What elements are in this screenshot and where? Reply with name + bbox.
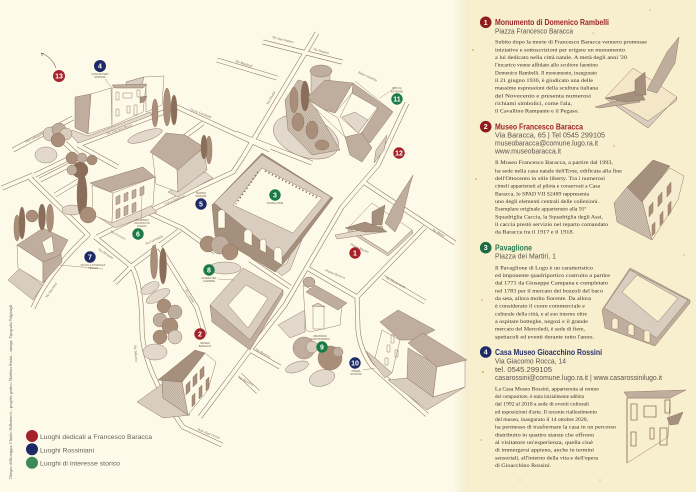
building: casa Baracca bbox=[137, 350, 216, 418]
marker labels bbox=[60, 72, 406, 376]
trees by casa Rossini bbox=[35, 88, 177, 178]
road names: Via Mentana bbox=[97, 247, 115, 260]
map markers: 7 bbox=[88, 254, 92, 262]
section 2: Museo Baracca: museobaracca@comune.lugo.ra.it bbox=[495, 141, 598, 148]
road names: Via Cantagallo bbox=[25, 131, 45, 144]
map markers: 1 bbox=[353, 250, 357, 258]
road network bbox=[2, 33, 455, 445]
section 4: Casa Rossini: 4 bbox=[484, 350, 488, 356]
marker labels: ORATORIO bbox=[135, 218, 149, 222]
marker labels: ROSSINI bbox=[196, 194, 207, 198]
marker labels: PAVAGLIONE bbox=[267, 201, 283, 205]
road names: Corso Matteotti bbox=[164, 194, 185, 206]
road names: Corso Garibaldi bbox=[190, 107, 212, 119]
section 4: Casa Rossini: dal 1992 al 2018 a sede di eventi culturali bbox=[495, 403, 590, 408]
section 2: Museo Baracca: 2 bbox=[484, 124, 488, 131]
marker labels: ORATORIO bbox=[313, 334, 327, 338]
section 2: Museo Baracca: dell'Ottocento in stile liberty. Tra i numerosi bbox=[495, 177, 606, 182]
road names: Viale degli Orsini bbox=[197, 427, 220, 440]
section 1: Monumento: richiami simbolici, come l'ala, bbox=[495, 102, 572, 107]
marker labels: SANT'ONOFRIO bbox=[310, 337, 330, 341]
marker labels: ROSSINI bbox=[351, 372, 362, 376]
section 4: Casa Rossini: tel. 0545.299105 bbox=[495, 367, 552, 374]
section 2: Museo Baracca: Squadriglia Caccia, la Squadriglia degli Assi, bbox=[495, 215, 603, 220]
map markers: 9 bbox=[320, 344, 324, 352]
marker labels: BARACCA bbox=[199, 344, 212, 348]
section 3: Pavaglione: mercato del Mercoledì, è sede di fiere, bbox=[495, 328, 585, 333]
road names: Via Baracca bbox=[238, 375, 255, 387]
map markers: 2 bbox=[198, 332, 202, 338]
section 2: Museo Baracca: cimeli appartenuti al pilota e conservati a Casa bbox=[495, 185, 601, 190]
marker labels: VECCHI bbox=[88, 266, 98, 270]
section 1: Monumento: Subito dopo la morte di Francesco Baracca vennero promosse bbox=[495, 41, 648, 46]
paper speckles bbox=[472, 9, 685, 481]
building: casa Rossini bbox=[70, 76, 164, 143]
section 1: Monumento: il 21 giugno 1936, è giudicato una delle bbox=[495, 79, 594, 84]
road names: Piazza Martiri bbox=[349, 242, 369, 254]
marker labels: ROCCA bbox=[392, 86, 402, 90]
section 1: Monumento: a lui dedicato nella città natale. A metà degli anni '20 bbox=[495, 56, 628, 61]
legend bbox=[26, 430, 152, 469]
section 3: Pavaglione: Piazza dei Martiri, 1 bbox=[495, 254, 556, 260]
section 2: Museo Baracca: Museo Francesco Baracca bbox=[495, 123, 584, 132]
panel: map bbox=[2, 33, 467, 445]
road names: Via Garibaldi bbox=[145, 234, 163, 246]
section 4: Casa Rossini: ha permesso di trasformare la casa in un percorso bbox=[495, 426, 617, 431]
section 3: Pavaglione bbox=[480, 242, 611, 340]
section 3: Pavaglione: Pavaglione bbox=[495, 243, 533, 252]
map markers: 11 bbox=[393, 96, 401, 104]
road names: Via Baracca bbox=[255, 347, 272, 359]
road names: Via Giacomo Rocca bbox=[106, 123, 133, 136]
section 2: Museo Baracca: il caccia prestò servizio nel reparto comandato bbox=[495, 223, 609, 228]
section 1: Monumento: Domenico Rambelli. Il monumento, inaugurato bbox=[495, 71, 598, 76]
map markers: 10 bbox=[351, 360, 359, 368]
legend: Luoghi dedicati a Francesco Baracca bbox=[40, 434, 152, 441]
map markers: 8 bbox=[207, 268, 211, 274]
section 1: Monumento: massime espressioni della scultura italiana bbox=[495, 87, 599, 92]
section 1: Monumento: del Novecento e presenta numerosi bbox=[495, 94, 592, 99]
map markers: 6 bbox=[136, 232, 140, 238]
section 1: Monumento: l'incarico venne affidato allo scultore faentino bbox=[495, 64, 599, 69]
trees San Francesco bbox=[284, 337, 343, 389]
map markers: 4 bbox=[98, 64, 102, 70]
marker labels: PIAZZA bbox=[137, 224, 147, 228]
monument bbox=[335, 175, 413, 256]
road names: Via Tellarini bbox=[133, 345, 138, 362]
road names: Via Mazzini bbox=[313, 47, 329, 55]
map markers: 3 bbox=[273, 192, 277, 200]
section 4: Casa Rossini bbox=[480, 346, 662, 469]
building: quadrilateral block bbox=[210, 268, 283, 350]
section 4: Casa Rossini: La Casa Museo Rossini, appartenuta al nonno bbox=[495, 387, 600, 392]
map markers: 5 bbox=[199, 202, 203, 208]
road names: Via Mattei bbox=[432, 227, 446, 238]
building: castle rocca bbox=[267, 65, 393, 167]
marker labels: CASA MUSEO bbox=[91, 72, 109, 76]
section 4: Casa Rossini: sensoriali, all'interno della vita e dell'opera bbox=[495, 456, 599, 461]
illustration: casa Rossini bbox=[624, 390, 686, 463]
marker labels: ESTENSE bbox=[391, 90, 403, 94]
illustration: pavaglione bbox=[602, 268, 690, 346]
section 2: Museo Baracca: da Baracca tra il 1917 e il 1918. bbox=[495, 231, 574, 236]
section 2: Museo Baracca: uno degli elementi centrali delle collezioni. bbox=[495, 200, 599, 205]
building: church bbox=[278, 277, 347, 338]
section 3: Pavaglione: culturale della città, e al suo interno oltre bbox=[495, 312, 588, 317]
section 3: Pavaglione: dal 1771 da Giuseppe Campana e completato bbox=[495, 282, 609, 287]
section 4: Casa Rossini: Casa Museo Gioacchino Rossini bbox=[495, 348, 602, 357]
map markers: 12 bbox=[395, 150, 403, 158]
road names: Via Sacchetti bbox=[45, 282, 58, 299]
road names bbox=[25, 35, 446, 440]
section 3: Pavaglione: nel 1783 per il mercato dei bozzoli del baco bbox=[495, 289, 604, 294]
marker labels: CARMINE bbox=[203, 279, 215, 283]
section 3: Pavaglione: 3 bbox=[484, 245, 488, 252]
panel: information column bbox=[468, 0, 696, 492]
marker labels: TEATRO bbox=[196, 191, 206, 195]
section 1: Monumento: Monumento di Domenico Rambelli bbox=[495, 18, 609, 27]
section 4: Casa Rossini: di Gioacchino Rossini. bbox=[495, 464, 551, 469]
section 4: Casa Rossini: ed esposizioni d'arte. Il recente riallestimento bbox=[495, 410, 598, 415]
section 2: Museo Baracca: Baracca, lo SPAD VII S2489 rappresenta bbox=[495, 192, 590, 197]
section 1: Monumento bbox=[480, 16, 648, 115]
section 2: Museo Baracca: Esemplare originale appartenuto alla 91ª bbox=[495, 207, 587, 213]
road names: Via Emaldi bbox=[265, 90, 276, 106]
section 3: Pavaglione: da seta, allora molto fiorente. Da allora bbox=[495, 297, 592, 302]
arrow: marker 13 direction bbox=[41, 53, 56, 68]
section 2: Museo Baracca: Via Baracca, 65 | Tel 0545 299105 bbox=[495, 133, 605, 140]
road names: Via Manfredi bbox=[235, 59, 253, 68]
section 4: Casa Rossini: del museo, inaugurato il 14 ottobre 2020, bbox=[495, 418, 588, 423]
marker labels: ROSSINI bbox=[95, 75, 106, 79]
section 4: Casa Rossini: casarossini@comune.lugo.ra.it | www.casarossinilugo.it bbox=[495, 375, 662, 382]
road names: Via Ferrucci bbox=[110, 229, 127, 241]
section 3: Pavaglione: ed imponente quadriportico costruito a partire bbox=[495, 274, 611, 279]
section 4: Casa Rossini: di immergersi appieno, anche in termini bbox=[495, 449, 595, 454]
building: villa left bbox=[8, 204, 68, 300]
trees near pavaglione bbox=[139, 236, 241, 360]
section 2: Museo Baracca bbox=[480, 121, 623, 236]
map markers bbox=[53, 60, 405, 369]
road names: Via Cavour bbox=[184, 288, 196, 304]
road names: Rotta Gardella bbox=[357, 70, 378, 83]
section 2: Museo Baracca: www.museobaracca.it bbox=[494, 149, 561, 156]
building: villa bbox=[150, 133, 213, 197]
map markers: 13 bbox=[55, 74, 63, 80]
marker labels: SAN ROCCO bbox=[134, 221, 150, 225]
section 3: Pavaglione: Il Pavaglione di Lugo è un caratteristico bbox=[495, 266, 594, 271]
section 4: Casa Rossini: distribuito in quattro stanze che offrono bbox=[495, 433, 595, 438]
section 4: Casa Rossini: Via Giacomo Rocca, 14 bbox=[495, 358, 566, 366]
legend: Luoghi di interesse storico bbox=[40, 461, 120, 468]
building: palazzo bbox=[62, 167, 157, 228]
section 1: Monumento: iniziative e sottoscrizioni per erigere un monumento bbox=[495, 48, 626, 53]
section 1: Monumento: Piazza Francesco Baracca bbox=[495, 28, 573, 35]
marker labels: CHIESA DEL bbox=[201, 276, 217, 280]
vertical credits: Disegno della mappa: Claudio Ballestracci – progetto grafico: Marilena Benini – stampa: Tipografia Valgimigli bbox=[8, 304, 13, 479]
section 2: Museo Baracca: Il Museo Francesco Baracca, a partire dal 1993, bbox=[495, 161, 613, 166]
road names: Via Mazzacurati bbox=[385, 275, 406, 289]
road names: Piazza Baracca bbox=[324, 268, 346, 280]
illustration: monumento bbox=[595, 37, 679, 128]
building: pavaglione bbox=[212, 153, 333, 276]
section 3: Pavaglione: è considerato il cuore commerciale e bbox=[495, 305, 586, 310]
road names: Via Sant'Andrea bbox=[272, 35, 294, 44]
marker labels: OPERA bbox=[351, 369, 361, 373]
illustration: museo Baracca bbox=[614, 160, 684, 240]
section 3: Pavaglione: spettacoli ed eventi durante tutto l'anno. bbox=[495, 335, 594, 340]
section 1: Monumento: 1 bbox=[484, 20, 488, 27]
marker labels: MUSEO bbox=[200, 341, 210, 345]
section 2: Museo Baracca: ha sede nella casa natale dell'Eroe, edificata alla fine bbox=[495, 169, 623, 174]
section 3: Pavaglione: a ospitare botteghe, negozi e il grande bbox=[495, 320, 589, 325]
section 4: Casa Rossini: del compositore, è stata inizialmente adibita bbox=[495, 395, 585, 400]
legend: Luoghi Rossiniani bbox=[40, 447, 94, 454]
section 4: Casa Rossini: al visitatore un'esperienza, quella cioè bbox=[495, 441, 594, 446]
section 1: Monumento: il Cavallino Rampante e il Pegaso. bbox=[495, 110, 579, 115]
building: oratorio block bbox=[366, 310, 467, 410]
marker labels: SCUOLA DI MUSICA bbox=[81, 263, 106, 267]
